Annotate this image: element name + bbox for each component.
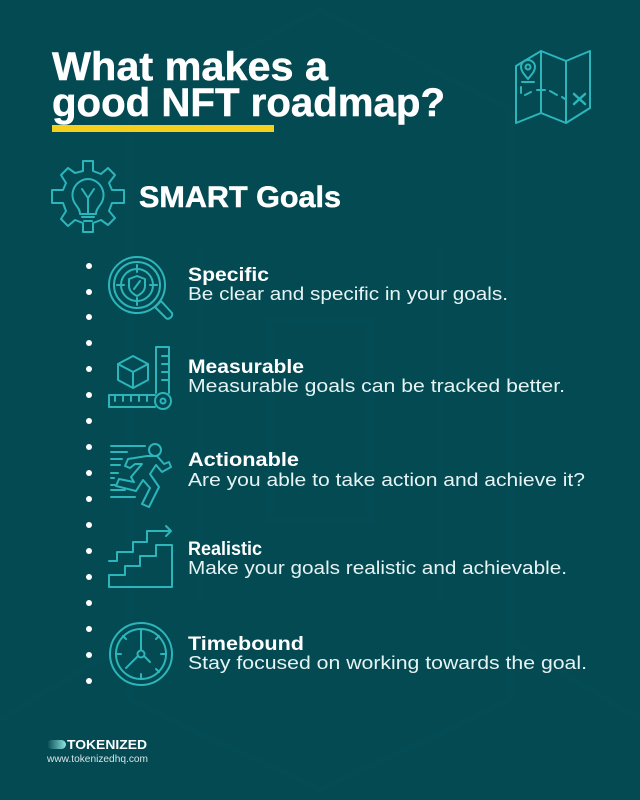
logo mark	[47, 740, 66, 749]
heading: SMART Goals: SMART Goals	[139, 181, 341, 214]
dotted timeline	[86, 263, 92, 684]
text: Measurable	[188, 357, 565, 396]
footer logo: TOKENIZED	[67, 737, 147, 752]
title underline	[52, 125, 274, 132]
text: Realistic: Make your goals realistic and achievable.	[188, 558, 567, 578]
icon: gear with light bulb	[52, 161, 124, 232]
icon: magnifier with shield	[109, 257, 172, 319]
text: Realistic	[188, 539, 567, 578]
text: Actionable: Actionable	[188, 450, 299, 471]
title	[52, 45, 445, 132]
title: good NFT roadmap?	[52, 81, 445, 125]
icon: stairs with arrow	[109, 526, 172, 587]
text: Timebound: Timebound	[188, 634, 304, 655]
text: Timebound	[188, 634, 587, 673]
icon: clock	[110, 623, 172, 685]
icon: cube and ruler	[109, 347, 171, 409]
footer logo	[46, 737, 148, 765]
text: Specific	[188, 265, 508, 304]
text: Measurable: Measurable goals can be tracked better.	[188, 376, 565, 396]
title: What makes a	[52, 45, 329, 89]
icon: folded map	[516, 51, 590, 123]
icon: running person	[111, 444, 171, 507]
text: Timebound: Stay focused on working towards the goal.	[188, 653, 587, 673]
text: Measurable: Measurable	[188, 357, 304, 378]
text: Actionable: Are you able to take action and achieve it?	[188, 470, 585, 490]
text: Specific: Specific	[188, 265, 269, 286]
text: Actionable	[188, 450, 585, 490]
text: Realistic: Realistic	[188, 539, 262, 560]
text: Specific: Be clear and specific in your goals.	[188, 284, 508, 304]
footer logo: www.tokenizedhq.com	[46, 754, 148, 765]
